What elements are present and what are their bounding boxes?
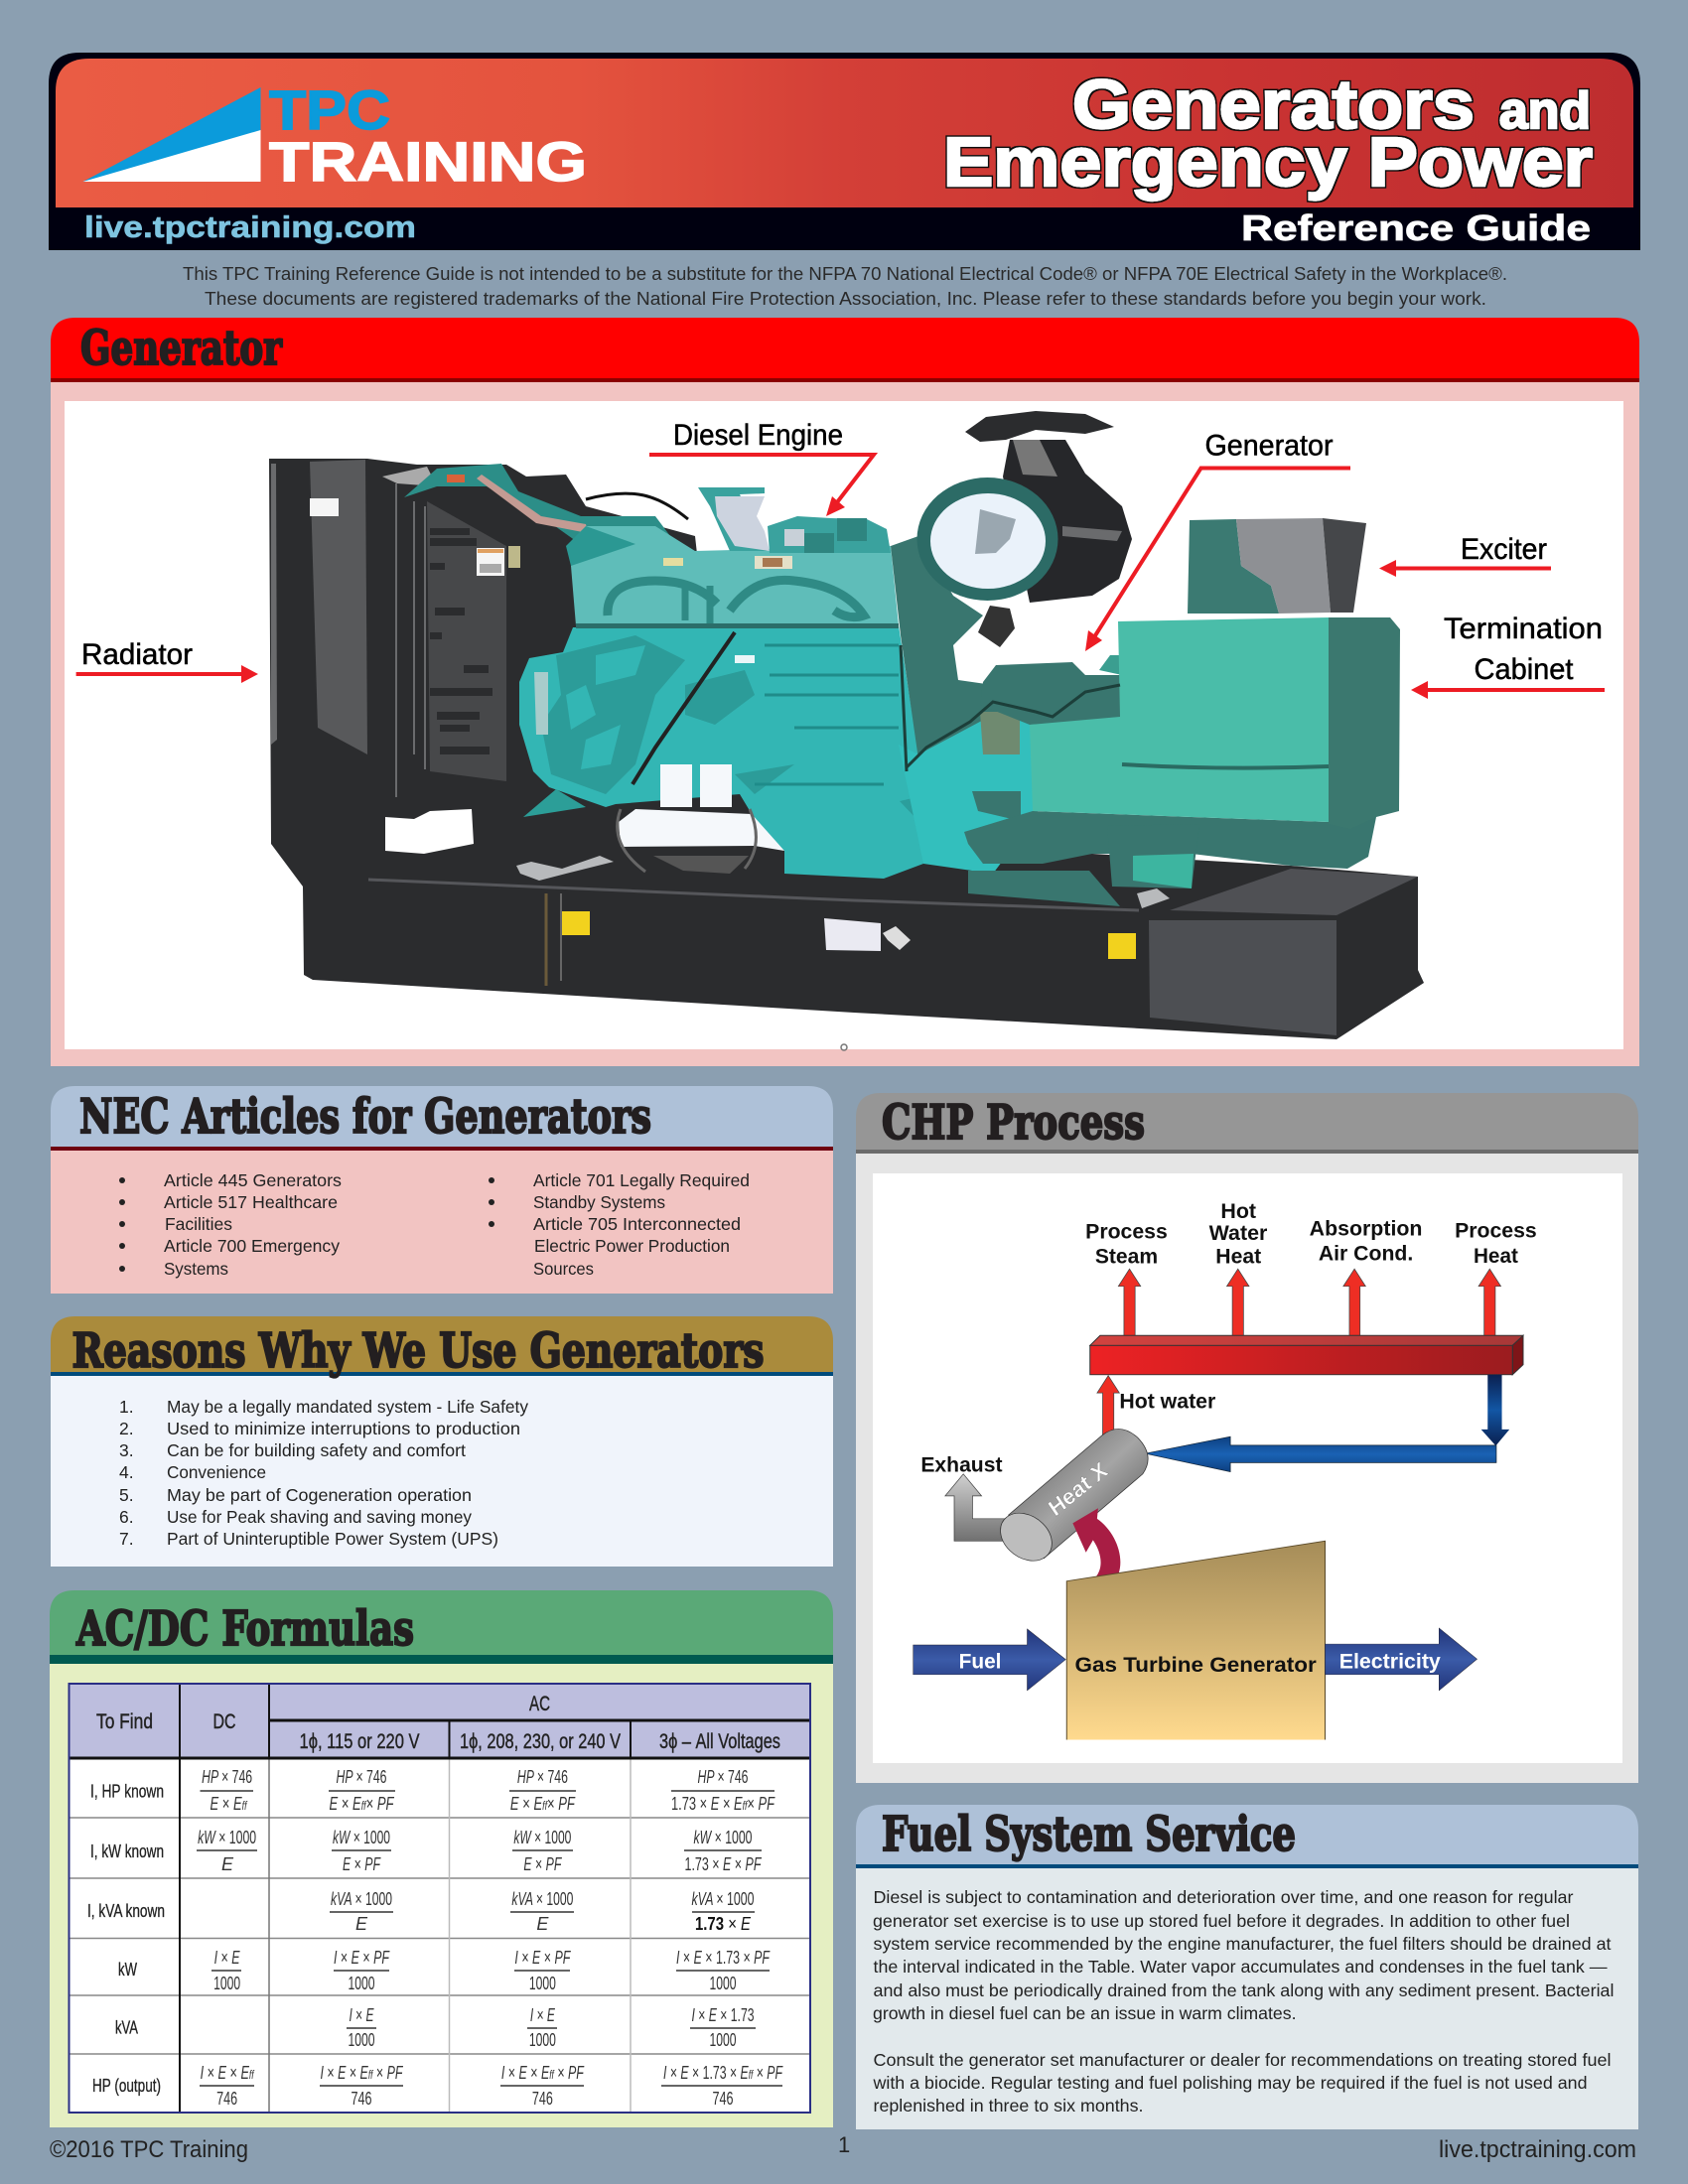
bullets right column: Article 701 Legally Required xyxy=(533,1170,750,1190)
label: exciter: Exciter xyxy=(1461,533,1547,566)
label: hot water: Hot water xyxy=(1119,1390,1216,1413)
arrow: exciter xyxy=(1379,560,1551,577)
row: kVA: I × E × 1.73 xyxy=(691,2005,755,2025)
table header: 3ϕ – All Voltages xyxy=(659,1730,780,1753)
row: I, kW known xyxy=(197,1828,762,1874)
table header: 1ϕ, 115 or 220 V xyxy=(300,1730,419,1753)
logo text xyxy=(269,78,587,193)
cylinder head xyxy=(571,526,899,625)
row: kW: I × E × PF xyxy=(334,1948,390,1968)
row: I, kW known: 1.73 × E × PF xyxy=(685,1854,762,1874)
row labels: I, kVA known xyxy=(87,1901,165,1921)
disclaimer: This TPC Training Reference Guide is not intended to be a substitute for the NFPA 70 National Electrical Code® or NFPA 70E Electrical Safety in the Workplace®. xyxy=(183,263,1507,284)
row: HP output: 746 xyxy=(532,2089,553,2109)
row: I, HP known xyxy=(201,1767,775,1814)
row: I, HP known: E × Eff xyxy=(211,1794,248,1814)
radiator and base silhouette xyxy=(269,459,1424,1039)
body text paragraph 1: growth in diesel fuel can be an issue in warm climates. xyxy=(873,2003,1297,2023)
label: termination cabinet: Termination xyxy=(1444,613,1603,645)
row: I, kVA known: 1.73 × E xyxy=(695,1914,752,1934)
row: HP output: I × E × Eff × PF xyxy=(320,2063,403,2083)
arrow: termination cabinet xyxy=(1411,681,1605,699)
row: I, HP known: E × Eff× PF xyxy=(330,1794,394,1814)
banner title: Emergency Power xyxy=(943,123,1593,201)
numbered list: May be a legally mandated system - Life Safety xyxy=(167,1397,528,1417)
output labels: Heat xyxy=(1474,1244,1518,1268)
label: radiator: Radiator xyxy=(81,638,193,671)
arrow: generator xyxy=(1085,469,1350,651)
engine block xyxy=(519,625,923,879)
panel: NEC articles xyxy=(51,1086,833,1294)
body text paragraph 2 xyxy=(872,2050,1611,2116)
output labels: Air Cond. xyxy=(1319,1242,1413,1265)
row: I, kW known: E xyxy=(221,1854,234,1874)
bullets left column: Article 700 Emergency xyxy=(164,1236,340,1256)
disclaimer: These documents are registered trademarks of the National Fire Protection Association, Inc. Please refer to these standards before you begin your work. xyxy=(205,288,1486,309)
row: I, HP known: HP × 746 xyxy=(202,1767,252,1787)
label: diesel engine: Diesel Engine xyxy=(673,419,843,452)
output arrows xyxy=(1118,1269,1501,1336)
arrow: diesel engine xyxy=(649,455,874,516)
arrow: radiator xyxy=(76,665,258,683)
row labels xyxy=(87,1781,165,2096)
bullets left column: Facilities xyxy=(165,1214,232,1234)
bullets left column: Systems xyxy=(164,1259,228,1279)
numbered list: 5. xyxy=(119,1485,134,1505)
output labels: Steam xyxy=(1095,1245,1158,1268)
bullets right column: Sources xyxy=(533,1259,594,1279)
generator illustration xyxy=(269,411,1424,1050)
row: I, kVA known xyxy=(330,1889,755,1934)
radiator core xyxy=(427,501,506,781)
output labels: Absorption xyxy=(1310,1217,1422,1240)
table header: 1ϕ, 208, 230, or 240 V xyxy=(460,1730,621,1753)
row labels: I, kW known xyxy=(90,1842,164,1861)
bullets left column: Article 517 Healthcare xyxy=(164,1192,338,1212)
panel: fuel system service xyxy=(856,1805,1638,2129)
numbered list: Use for Peak shaving and saving money xyxy=(167,1507,472,1527)
row: HP output: 746 xyxy=(352,2089,371,2109)
row: kW: I × E × PF xyxy=(514,1948,571,1968)
alternator foot xyxy=(1107,824,1199,888)
row: kVA: 1000 xyxy=(709,2030,737,2050)
row: I, kVA known: kVA × 1000 xyxy=(511,1889,573,1909)
bullets right column xyxy=(489,1170,750,1279)
row: I, kVA known: kVA × 1000 xyxy=(331,1889,392,1909)
row: I, HP known: HP × 746 xyxy=(517,1767,568,1787)
fuel arrow xyxy=(914,1629,1065,1691)
numbered list: 6. xyxy=(119,1507,134,1527)
base details xyxy=(368,880,1139,910)
numbered list: 4. xyxy=(119,1462,134,1482)
heading: Generator xyxy=(80,321,283,376)
coolant pipe xyxy=(382,467,437,486)
row: kVA: 1000 xyxy=(529,2030,556,2050)
numbered list: May be part of Cogeneration operation xyxy=(167,1485,472,1505)
exhaust heat arrow xyxy=(1072,1508,1120,1576)
label: termination cabinet: Cabinet xyxy=(1474,653,1574,686)
numbered list: Part of Uninteruptible Power System (UPS) xyxy=(167,1529,498,1549)
row: I, HP known: HP × 746 xyxy=(697,1767,749,1787)
numbered list: 1. xyxy=(119,1397,134,1417)
row: I, kVA known: kVA × 1000 xyxy=(691,1889,755,1909)
row labels: HP (output) xyxy=(92,2076,161,2096)
bullets left column: Article 445 Generators xyxy=(164,1170,342,1190)
body text paragraph 1: generator set exercise is to use up stored fuel before it degrades. In addition to other fuel xyxy=(873,1911,1570,1931)
label: generator: Generator xyxy=(1205,429,1334,463)
hot water header bar xyxy=(1090,1335,1523,1375)
bullets right column: Standby Systems xyxy=(533,1192,665,1212)
fuel tank details xyxy=(619,809,784,851)
panel: reasons xyxy=(51,1316,833,1567)
logo triangle xyxy=(83,87,260,182)
row: I, kW known: kW × 1000 xyxy=(198,1828,256,1847)
body text paragraph 2: replenished in three to six months. xyxy=(874,2096,1144,2116)
fuel arrow: Fuel xyxy=(959,1649,1001,1673)
logo text: TRAINING xyxy=(269,130,587,193)
numbered list: Used to minimize interruptions to production xyxy=(167,1419,520,1438)
output labels: Water xyxy=(1209,1221,1268,1245)
flywheel housing and air filter xyxy=(1003,440,1132,603)
row: kW: 1000 xyxy=(348,1974,375,1993)
numbered list: Convenience xyxy=(167,1462,266,1482)
panel: generator xyxy=(51,318,1639,1066)
heading: Fuel System Service xyxy=(882,1807,1296,1862)
numbered list: 3. xyxy=(119,1440,134,1460)
row: I, HP known: HP × 746 xyxy=(336,1767,387,1787)
numbered list: 2. xyxy=(119,1419,134,1438)
table header xyxy=(96,1693,780,1753)
footer xyxy=(50,2132,1636,2163)
label: termination cabinet xyxy=(1444,613,1603,686)
row: I, kW known: kW × 1000 xyxy=(333,1828,390,1847)
copyright: ©2016 TPC Training xyxy=(50,2136,248,2163)
row: I, HP known: 1.73 × E × Eff× PF xyxy=(671,1794,775,1814)
heat exchanger: Heat X xyxy=(1042,1458,1114,1520)
bullets right column: Electric Power Production xyxy=(534,1236,730,1256)
heading: NEC Articles for Generators xyxy=(79,1089,651,1145)
panel: AC/DC formulas xyxy=(50,1590,833,2127)
numbered list: Can be for building safety and comfort xyxy=(167,1440,466,1460)
heat exchanger xyxy=(990,1429,1148,1570)
heading: Reasons Why We Use Generators xyxy=(71,1323,765,1379)
alternator body xyxy=(964,811,1376,869)
row: kW: I × E × 1.73 × PF xyxy=(676,1948,771,1968)
row: I, kVA known: E xyxy=(355,1914,368,1934)
page number: 1 xyxy=(838,2132,850,2157)
row: kVA: 1000 xyxy=(348,2030,375,2050)
row: kVA xyxy=(347,2005,756,2050)
bullets right column: Article 705 Interconnected xyxy=(533,1214,741,1234)
disclaimer xyxy=(183,263,1507,309)
banner title: Generators xyxy=(1072,66,1475,143)
body text paragraph 1: and also must be periodically drained from the tank along with any sediment present. Bacterial xyxy=(874,1980,1615,2000)
formula table xyxy=(69,1684,810,2113)
row: HP output: 746 xyxy=(713,2089,733,2109)
row: kVA: I × E xyxy=(350,2005,374,2025)
banner title xyxy=(943,66,1593,201)
row labels: kVA xyxy=(115,2017,138,2037)
body text paragraph 1 xyxy=(873,1887,1615,2023)
logo text: TPC xyxy=(269,78,390,141)
reference guide label: Reference Guide xyxy=(1241,207,1591,248)
footer website: live.tpctraining.com xyxy=(1439,2136,1636,2163)
row: HP output: 746 xyxy=(216,2089,237,2109)
output labels: Process xyxy=(1085,1220,1168,1243)
return arrow down xyxy=(1481,1375,1509,1445)
hot water arrow xyxy=(1097,1376,1119,1442)
gas turbine generator: Gas Turbine Generator xyxy=(1074,1653,1317,1677)
row: kW: I × E xyxy=(214,1948,240,1968)
exhaust arrow xyxy=(945,1474,1006,1541)
row: HP output: I × E × Eff xyxy=(201,2063,255,2083)
exciter xyxy=(1188,519,1279,614)
row: I, HP known: E × Eff× PF xyxy=(510,1794,576,1814)
row: I, kW known: E × PF xyxy=(523,1854,562,1874)
body text paragraph 1: system service recommended by the engine manufacturer, the fuel filters should be drained at xyxy=(874,1934,1612,1954)
CHP diagram xyxy=(914,1199,1537,1739)
row: kW: 1000 xyxy=(709,1974,737,1993)
output labels: Hot xyxy=(1220,1199,1257,1223)
row: I, kW known: kW × 1000 xyxy=(693,1828,753,1847)
row: kW: 1000 xyxy=(529,1974,556,1993)
gas turbine generator xyxy=(1066,1541,1325,1739)
body text paragraph 1: Diesel is subject to contamination and deterioration over time, and one reason for regular xyxy=(874,1887,1574,1907)
panel: CHP process xyxy=(856,1093,1638,1783)
banner title: and xyxy=(1499,82,1591,140)
electricity arrow: Electricity xyxy=(1339,1649,1441,1673)
table header: DC xyxy=(212,1710,236,1733)
row: I, kW known: E × PF xyxy=(343,1854,381,1874)
row labels: kW xyxy=(118,1960,137,1979)
row labels: I, HP known xyxy=(90,1781,164,1801)
row: HP output xyxy=(200,2063,783,2109)
row: kW xyxy=(211,1948,771,1993)
output labels: Process xyxy=(1455,1219,1537,1242)
row: HP output: I × E × 1.73 × Eff × PF xyxy=(663,2063,783,2083)
bullets left column xyxy=(119,1170,342,1279)
output labels xyxy=(1085,1199,1537,1268)
turbo xyxy=(768,516,891,553)
numbered list: 7. xyxy=(119,1529,134,1549)
label: exhaust: Exhaust xyxy=(920,1453,1003,1476)
heading: CHP Process xyxy=(882,1095,1145,1151)
exhaust pipe xyxy=(698,487,767,551)
return arrow left xyxy=(1145,1436,1496,1472)
electricity arrow xyxy=(1325,1628,1477,1691)
website link: live.tpctraining.com xyxy=(84,209,416,244)
row: HP output: I × E × Eff × PF xyxy=(501,2063,585,2083)
body text paragraph 2: Consult the generator set manufacturer or dealer for recommendations on treating stored fuel xyxy=(874,2050,1611,2070)
output labels: Heat xyxy=(1215,1245,1262,1268)
body text paragraph 2: with a biocide. Regular testing and fuel polishing may be required if the fuel is not used and xyxy=(872,2073,1587,2093)
alternator connection xyxy=(900,787,960,821)
numbered list xyxy=(119,1397,528,1549)
row: I, kVA known: E xyxy=(536,1914,549,1934)
table header: AC xyxy=(529,1693,550,1715)
body text paragraph 1: the interval indicated in the Table. Water vapor accumulates and condenses in the fuel tank — xyxy=(874,1957,1608,1977)
table header: To Find xyxy=(96,1710,153,1733)
banner xyxy=(49,53,1640,250)
row: kW: 1000 xyxy=(213,1974,240,1993)
row: kVA: I × E xyxy=(530,2005,556,2025)
heading: AC/DC Formulas xyxy=(75,1601,414,1657)
row: I, kW known: kW × 1000 xyxy=(513,1828,571,1847)
